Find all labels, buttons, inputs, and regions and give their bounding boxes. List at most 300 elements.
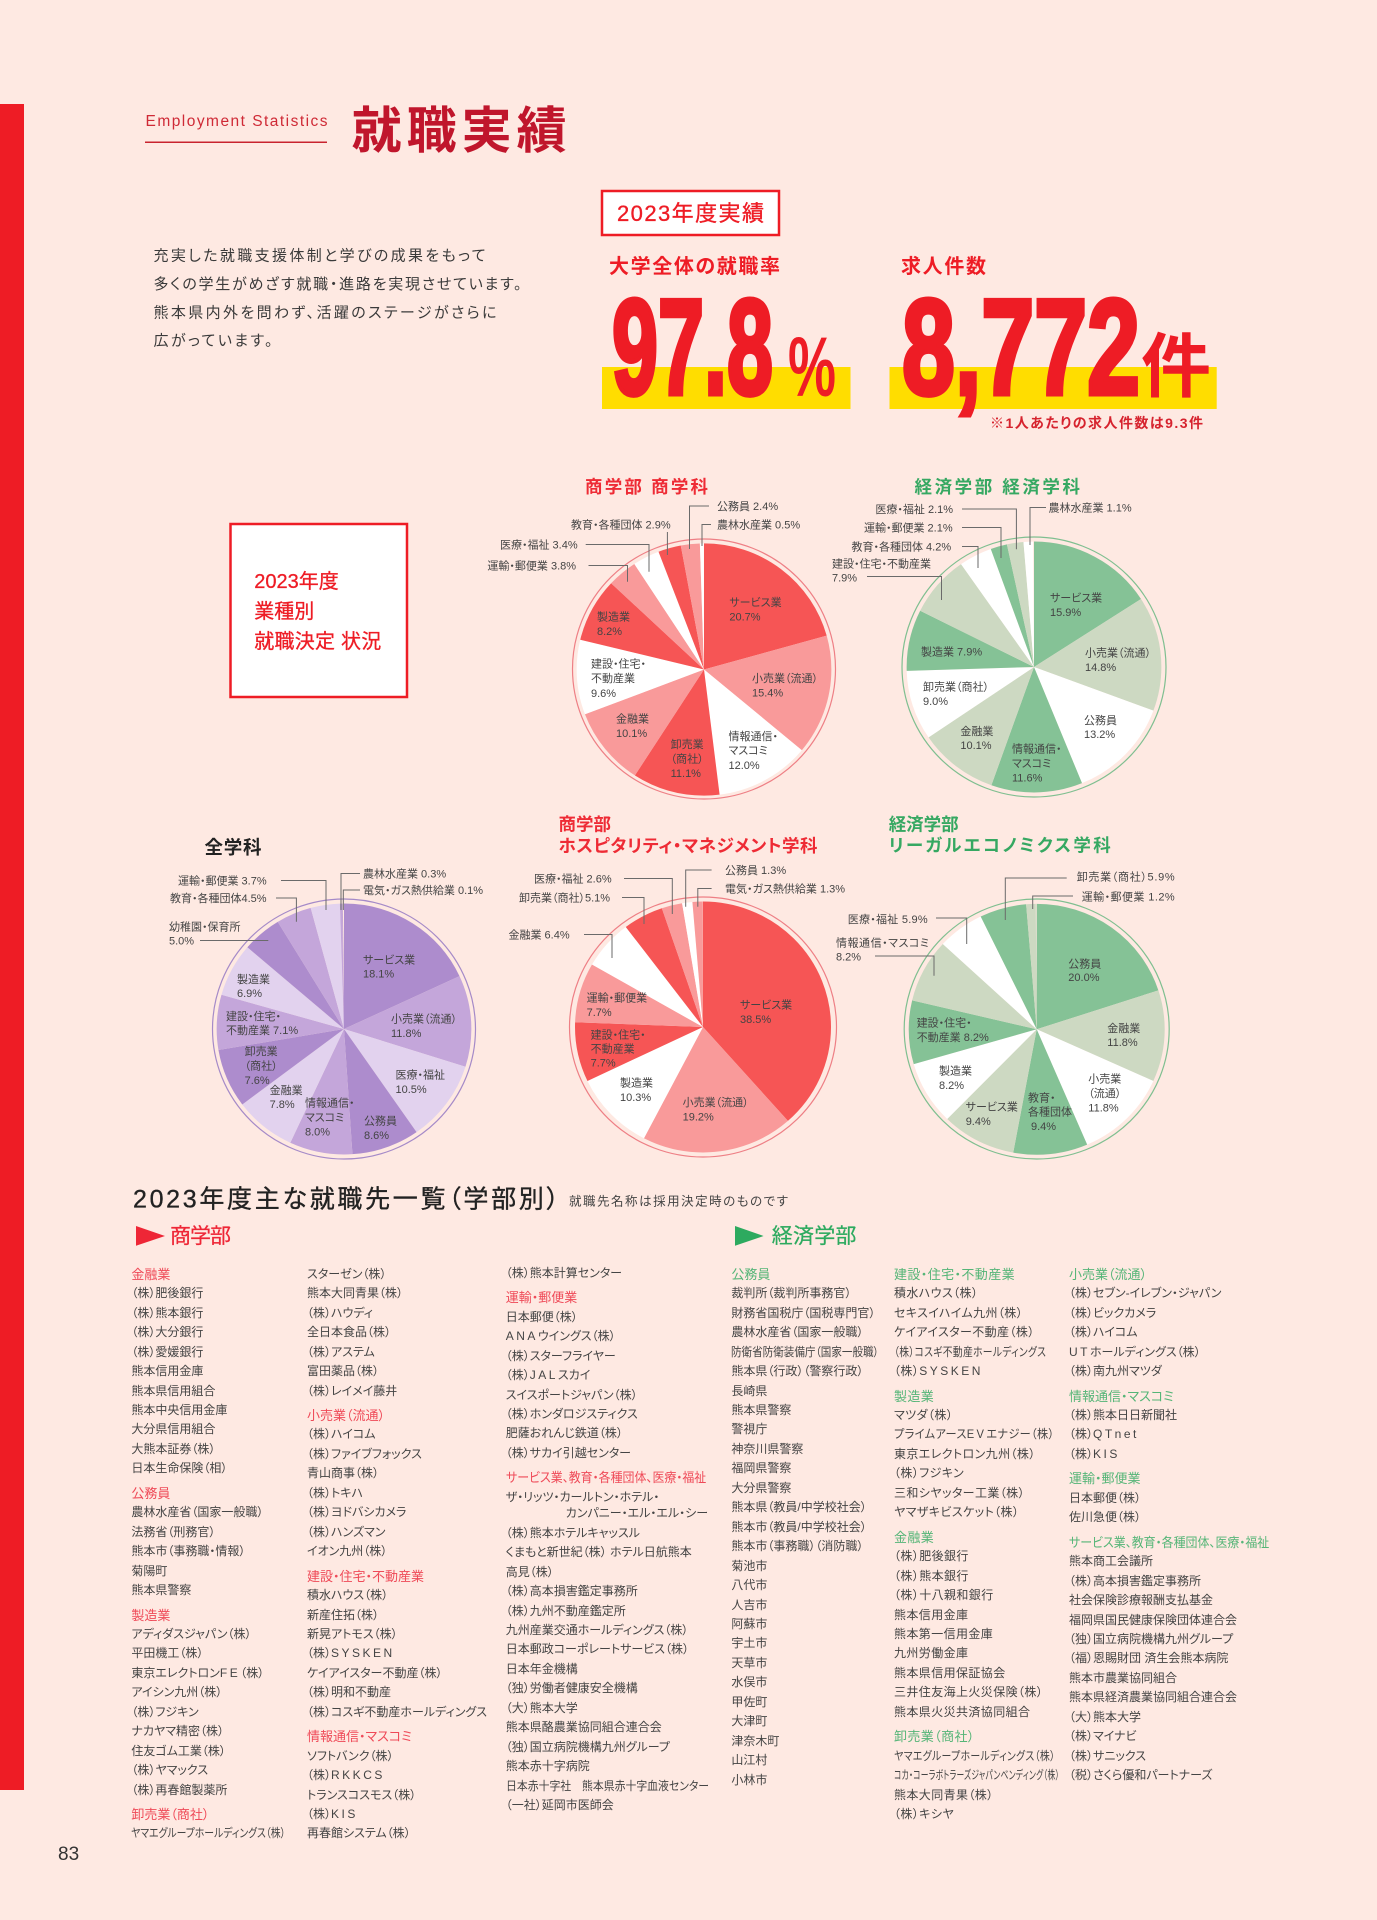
box: 2023年度 業種別 就職決定状況: 業種別	[254, 600, 314, 623]
slice labels: 不動産業	[591, 1042, 635, 1056]
group: サービス業ほか	[1069, 1535, 1269, 1782]
slice labels: 小売業	[1088, 1073, 1121, 1086]
callouts: 医療・福祉 2.6%	[534, 872, 612, 886]
group: 情報通信: （株）RKKCS	[307, 1768, 385, 1782]
callouts	[832, 501, 1132, 600]
intro paragraph: 熊本県内外を問わず、活躍のステージがさらに	[154, 304, 496, 321]
group: 製造業: （株）ヤマックス	[131, 1763, 208, 1777]
group: 建設: 新晃アトモス（株）	[307, 1627, 398, 1641]
list column: 経済学部 3	[1069, 1267, 1269, 1782]
slice labels: 金融業	[270, 1084, 303, 1097]
group: 小売業: （株）トキハ	[307, 1486, 363, 1500]
group: サービス業ほか: （独）労働者健康安全機構	[506, 1681, 638, 1695]
pie title: 商学部	[558, 814, 611, 834]
group: サービス業ほか: 社会保険診療報酬支払基金	[1069, 1593, 1213, 1607]
stat label: 大学全体の就職率	[609, 255, 780, 278]
slice labels: 公務員	[364, 1113, 397, 1127]
intro paragraph: 広がっています。	[154, 333, 272, 350]
group: 金融業: （株）肥後銀行	[131, 1286, 203, 1300]
group: 情報通信	[307, 1729, 416, 1840]
subtitle rule	[145, 142, 327, 143]
group: 金融業: （株）愛媛銀行	[131, 1345, 203, 1359]
callouts: 卸売業（商社）5.9%	[1077, 869, 1175, 883]
group: 建設: ケイアイスター不動産（株）	[894, 1325, 1035, 1339]
group: 公務員	[731, 1267, 879, 1787]
box: 2023年度 業種別 就職決定状況	[230, 524, 407, 697]
group: 運輸: 運輸・郵便業	[1069, 1471, 1141, 1486]
group: 金融業 continued	[307, 1267, 403, 1398]
pie slices	[640, 606, 768, 733]
group: 製造業: 製造業	[894, 1389, 934, 1404]
slice labels: 7.6%	[245, 1075, 270, 1087]
callouts: 農林水産業 0.3%	[363, 866, 446, 880]
slice labels: 8.2%	[597, 626, 622, 638]
slice labels: 金融業	[960, 725, 993, 738]
group: 公務員: 大津町	[731, 1714, 767, 1728]
pie slices	[973, 967, 1101, 1092]
slice labels: サービス業	[1050, 592, 1102, 605]
slice labels: 製造業	[939, 1064, 972, 1078]
callouts: 運輸・郵便業 2.1%	[864, 522, 953, 535]
group: 建設: 新産住拓（株）	[307, 1608, 379, 1622]
group: 運輸: ANAウイングス（株）	[506, 1329, 616, 1343]
group: 金融業 continued: 全日本食品（株）	[307, 1325, 391, 1339]
callouts: 建設・住宅・不動産業	[832, 557, 931, 571]
group: 公務員: 福岡県警察	[731, 1461, 791, 1475]
group: 製造業: 東京エレクトロン九州（株）	[894, 1447, 1036, 1461]
callouts: 幼稚園・保育所	[169, 919, 240, 933]
group: 建設: 建設・住宅・不動産業	[894, 1267, 1015, 1282]
group: 金融業 continued: スターゼン（株）	[307, 1267, 386, 1281]
slice labels: 情報通信・	[728, 729, 778, 743]
footnote: ※1人あたりの求人件数は9.3件	[990, 415, 1203, 431]
pie ring	[212, 899, 476, 1159]
group: 金融業 continued: （株）アステム	[307, 1345, 375, 1359]
group: 運輸: スイスポートジャパン（株）	[506, 1388, 638, 1402]
group: 情報通信: 情報通信・マスコミ	[1069, 1389, 1174, 1404]
group: サービス業ほか: （株）マイナビ	[1069, 1729, 1137, 1743]
slice labels: 11.8%	[1107, 1037, 1138, 1049]
group: 公務員: 熊本県（教員/中学校社会）	[731, 1500, 867, 1514]
group: 製造業: 東京エレクトロンFE（株）	[131, 1666, 264, 1680]
group: 小売業: （株）ビックカメラ	[1069, 1306, 1156, 1320]
group: 製造業: マツダ（株）	[894, 1408, 953, 1422]
group: 製造業: アディダスジャパン（株）	[131, 1627, 251, 1641]
group: 公務員: 農林水産省（国家一般職）	[731, 1325, 863, 1339]
badge: 2023年度実績: 2023年度実績	[617, 201, 764, 226]
slice labels: サービス業	[740, 998, 792, 1011]
slice labels: （流通）	[1088, 1087, 1121, 1100]
group: サービス業ほか: 高見（株）	[506, 1565, 554, 1579]
group: 公務員: 神奈川県警察	[731, 1442, 803, 1456]
yellow highlight	[602, 367, 850, 409]
slice labels: 小売業（流通）	[683, 1096, 749, 1109]
group: サービス業ほか: （株）熊本ホテルキャッスル	[506, 1526, 640, 1540]
group: 製造業: ヤマザキビスケット（株）	[894, 1505, 1019, 1519]
slice labels: 小売業（流通）	[752, 672, 818, 685]
callouts	[508, 863, 845, 958]
list column: 商学部 1	[131, 1267, 286, 1840]
group: 製造業	[894, 1389, 1055, 1519]
group: 公務員: 天草市	[731, 1656, 767, 1670]
group: 運輸	[1069, 1471, 1141, 1524]
group: 小売業: 小売業（流通）	[1069, 1267, 1147, 1282]
callouts: 農林水産業 1.1%	[1048, 501, 1132, 515]
group: サービス業ほか	[506, 1470, 709, 1812]
left red bar	[0, 104, 24, 1790]
slice labels: 9.0%	[923, 696, 948, 708]
pie title: 商学部 商学科	[585, 477, 708, 497]
group: サービス業ほか: 熊本県酪農業協同組合連合会	[506, 1720, 662, 1734]
group: 金融業: 熊本県信用組合	[131, 1384, 215, 1398]
callouts: 運輸・郵便業 3.7%	[178, 874, 267, 887]
pie ring	[902, 537, 1166, 797]
callouts: 公務員 2.4%	[717, 499, 778, 513]
slice labels: 小売業（流通）	[1085, 647, 1151, 660]
group: 金融業: 熊本中央信用金庫	[131, 1403, 227, 1417]
group: サービス業ほか: 熊本赤十字病院	[506, 1759, 590, 1773]
group: サービス業ほか: 日本赤十字社 熊本県赤十字血液センター	[506, 1779, 709, 1793]
callouts	[169, 866, 483, 948]
stat: employment rate	[602, 255, 850, 423]
group: 公務員: 公務員	[131, 1486, 170, 1501]
slice labels: 7.8%	[270, 1099, 295, 1111]
group: 公務員: 財務省国税庁（国税専門官）	[731, 1306, 875, 1320]
group: サービス業ほか: （福）恩賜財団 済生会熊本病院	[1069, 1651, 1228, 1665]
group: 小売業: イオン九州（株）	[307, 1544, 387, 1558]
slice labels: 10.3%	[620, 1092, 651, 1104]
slice labels	[587, 991, 792, 1124]
group: 運輸: 佐川急便（株）	[1069, 1510, 1141, 1524]
intro paragraph: 充実した就職支援体制と学びの成果をもって	[154, 248, 486, 265]
group: 製造業: 製造業	[131, 1608, 170, 1622]
pie title: リーガルエコノミクス学科	[889, 836, 1111, 856]
group: 製造業: （株）フジキン	[894, 1466, 964, 1480]
slice labels: 15.4%	[752, 688, 783, 700]
group: 卸売業: 熊本大同青果（株）	[894, 1788, 994, 1802]
group: 建設	[307, 1569, 487, 1719]
group: 運輸: （株）スターフライヤー	[506, 1349, 616, 1363]
group: サービス業ほか: 熊本市農業協同組合	[1069, 1671, 1177, 1685]
group: 製造業: （株）再春館製薬所	[131, 1783, 227, 1797]
callouts: 農林水産業 0.5%	[717, 517, 800, 531]
slice labels: 建設・住宅・	[226, 1009, 281, 1023]
pie ring	[570, 897, 836, 1157]
intro paragraph: 多くの学生がめざす就職・進路を実現させています。	[154, 275, 522, 293]
group: 卸売業: ヤマエグループホールディングス（株）	[131, 1826, 286, 1840]
group: 情報通信: （株）QTnet	[1069, 1427, 1139, 1441]
group: 建設: （株）SYSKEN	[894, 1364, 983, 1378]
group: 情報通信	[1069, 1389, 1177, 1461]
number 8,772: 8,772	[902, 271, 1140, 423]
slice labels	[226, 953, 457, 1142]
faculty header: 商学部	[136, 1225, 231, 1248]
group: 小売業: UTホールディングス（株）	[1069, 1345, 1201, 1359]
group: 金融業: 九州労働金庫	[894, 1646, 968, 1660]
group: サービス業ほか: 日本郵政コーポレートサービス（株）	[506, 1642, 689, 1656]
group: サービス業ほか: 熊本県経済農業協同組合連合会	[1069, 1690, 1237, 1704]
pie slices	[280, 966, 408, 1092]
group: 小売業: （株）南九州マツダ	[1069, 1364, 1162, 1378]
slice labels: （商社）	[671, 752, 704, 766]
callouts: 情報通信・マスコミ	[836, 936, 929, 950]
group: 金融業: （株）熊本銀行	[894, 1569, 969, 1583]
header	[145, 103, 567, 159]
group: 卸売業: （株）キシヤ	[894, 1807, 954, 1821]
group: サービス業ほか: （株）サニックス	[1069, 1749, 1146, 1763]
group: 小売業: 小売業（流通）	[307, 1408, 385, 1423]
group: 公務員: 長崎県	[731, 1384, 767, 1398]
group: 情報通信: 情報通信・マスコミ	[307, 1729, 412, 1744]
group: 公務員: 農林水産省（国家一般職）	[131, 1505, 263, 1519]
unit 件: 件	[1141, 328, 1211, 406]
group: 運輸: 日本郵便（株）	[506, 1310, 578, 1324]
group: 金融業: （株）十八親和銀行	[894, 1588, 994, 1602]
pie: 経済学部 リーガルエコノミクス学科	[836, 814, 1175, 1159]
group: 建設: （株）明和不動産	[307, 1685, 391, 1699]
slice labels	[921, 592, 1151, 785]
group: 運輸	[506, 1290, 638, 1460]
group: 小売業: （株）ハイコム	[307, 1427, 376, 1441]
group: 運輸: 日本郵便（株）	[1069, 1491, 1141, 1505]
group: サービス業ほか: （大）熊本大学	[506, 1701, 578, 1715]
slice labels: 9.6%	[591, 688, 616, 700]
slice labels: 10.5%	[396, 1084, 427, 1096]
slice labels: 15.9%	[1050, 607, 1081, 619]
slice labels: 教育・	[1028, 1091, 1056, 1104]
callouts: 医療・福祉 3.4%	[500, 537, 578, 551]
callouts	[487, 499, 800, 582]
slice labels: 6.9%	[237, 988, 262, 1000]
faculty header: 経済学部: 経済学部	[772, 1225, 856, 1248]
group: 運輸: （株）ホンダロジスティクス	[506, 1407, 638, 1421]
group: 情報通信: ソフトバンク（株）	[307, 1749, 394, 1763]
slice labels: 11.8%	[391, 1028, 422, 1040]
group: サービス業ほか: くまもと新世紀（株） ホテル日航熊本	[506, 1545, 692, 1559]
group: 卸売業: 卸売業（商社）	[131, 1807, 209, 1822]
slice labels: 情報通信・	[1012, 742, 1062, 756]
slice labels: 建設・住宅・	[591, 1028, 646, 1042]
group: 小売業: （株）ハイコム	[1069, 1325, 1138, 1339]
group: 小売業	[307, 1408, 422, 1558]
callouts: 教育・各種団体 2.9%	[571, 517, 671, 531]
group: 小売業: （株）セブン-イレブン・ジャパン	[1069, 1286, 1221, 1300]
group: 製造業: ナカヤマ精密（株）	[131, 1724, 224, 1738]
badge: 2023年度実績	[602, 191, 779, 235]
group: 公務員: 法務省（刑務官）	[131, 1525, 215, 1539]
intro paragraph	[154, 248, 522, 350]
callouts	[836, 869, 1175, 976]
group: 建設: （株）コスギ不動産ホールディングス	[894, 1345, 1046, 1359]
group: サービス業ほか: （大）熊本大学	[1069, 1710, 1141, 1724]
slice labels: マスコミ	[728, 745, 768, 757]
group: 公務員: 防衛省防衛装備庁（国家一般職）	[731, 1345, 879, 1359]
group: 公務員: 水俣市	[731, 1675, 767, 1689]
slice labels: 金融業	[1107, 1022, 1140, 1035]
group: サービス業ほか: 日本年金機構	[506, 1662, 578, 1676]
group: 公務員: 熊本市（事務職）（消防職）	[731, 1539, 863, 1553]
stat: job offers	[890, 255, 1217, 431]
slice labels: 9.4%	[1031, 1121, 1056, 1133]
group: 金融業: 金融業	[131, 1267, 170, 1282]
group: サービス業ほか: 九州産業交通ホールディングス（株）	[506, 1623, 688, 1637]
group: サービス業ほか: カンパニー・エル・エル・シー	[566, 1506, 708, 1520]
english subtitle: Employment Statistics	[146, 113, 328, 130]
group: 金融業: 大分県信用組合	[131, 1422, 215, 1436]
pie: 全学科	[169, 837, 483, 1159]
group: 公務員: 人吉市	[731, 1598, 767, 1612]
slice labels: 13.2%	[1084, 729, 1115, 741]
callouts: 8.2%	[836, 952, 861, 964]
slice labels: 8.6%	[364, 1130, 389, 1142]
list heading: 2023年度主な就職先一覧（学部別）	[133, 1186, 559, 1214]
slice labels: 製造業	[620, 1076, 653, 1090]
pie slices	[970, 604, 1098, 730]
group: 公務員: 公務員	[731, 1267, 770, 1282]
slice labels: （商社）	[245, 1059, 278, 1073]
slice labels: 11.1%	[671, 768, 701, 780]
group: 金融業	[131, 1267, 227, 1475]
callouts: 電気・ガス熱供給業 0.1%	[363, 883, 483, 897]
group: 公務員: 熊本県警察	[731, 1403, 791, 1417]
group: 運輸: （株）サカイ引越センター	[506, 1446, 631, 1460]
slice labels: 18.1%	[363, 968, 394, 980]
slice labels: 製造業	[597, 610, 630, 624]
group: 金融業: （株）肥後銀行	[894, 1549, 969, 1563]
group: 情報通信: （株）熊本日日新聞社	[1069, 1408, 1177, 1422]
group: 公務員: 八代市	[731, 1578, 767, 1592]
callouts: 教育・各種団体4.5%	[170, 891, 267, 905]
slice labels: 不動産業	[591, 671, 635, 685]
slice labels: 卸売業	[245, 1044, 278, 1058]
slice labels: 8.0%	[305, 1127, 330, 1139]
group: 金融業: 熊本県火災共済協同組合	[894, 1705, 1030, 1719]
group: 小売業	[1069, 1267, 1222, 1378]
group: 公務員: 熊本市（事務職・情報）	[131, 1544, 245, 1558]
slice labels: 38.5%	[740, 1014, 771, 1026]
callouts: 5.0%	[169, 936, 194, 948]
group: 公務員: 警視庁	[731, 1422, 767, 1436]
group: 公務員: 熊本市（教員/中学校社会）	[731, 1520, 867, 1534]
number 97.8: 97.8	[612, 271, 773, 423]
group: 情報通信: （株）KIS	[307, 1807, 358, 1821]
slice labels: マスコミ	[305, 1112, 344, 1124]
slice labels: 14.8%	[1085, 662, 1116, 674]
slice labels: サービス業	[729, 596, 782, 609]
slice labels: 製造業	[237, 972, 270, 986]
group: 製造業: アイシン九州（株）	[131, 1685, 222, 1699]
slice labels: 20.7%	[729, 612, 761, 624]
slice labels: マスコミ	[1012, 758, 1051, 770]
slice labels: 11.8%	[1088, 1103, 1119, 1115]
slice labels: 運輸・郵便業	[587, 991, 647, 1004]
group: 卸売業	[131, 1807, 286, 1840]
slice labels: 8.2%	[939, 1080, 964, 1092]
callouts: 運輸・郵便業 1.2%	[1082, 890, 1175, 903]
slice labels: 医療・福祉	[396, 1067, 445, 1081]
callouts: 7.9%	[832, 573, 857, 585]
pie slices	[639, 964, 767, 1090]
callouts: 卸売業（商社）5.1%	[519, 890, 610, 904]
pie ring	[904, 899, 1169, 1159]
callouts: 電気・ガス熱供給業 1.3%	[725, 882, 845, 896]
group: サービス業ほか: （株）高本損害鑑定事務所	[506, 1584, 638, 1598]
group: 情報通信: 再春館システム（株）	[307, 1826, 411, 1840]
group: 建設: （株）SYSKEN	[307, 1646, 395, 1660]
group: 運輸: 運輸・郵便業	[506, 1290, 577, 1305]
group: 情報通信: トランスコスモス（株）	[307, 1788, 416, 1802]
slice labels	[917, 956, 1140, 1133]
slice labels: 製造業 7.9%	[921, 644, 982, 658]
group: サービス業ほか: サービス業、教育・各種団体、医療・福祉	[1069, 1535, 1269, 1550]
slice labels: 建設・住宅・	[917, 1016, 972, 1030]
group: 建設: 積水ハウス（株）	[307, 1588, 388, 1602]
slice labels: 12.0%	[728, 760, 760, 772]
slice labels: 卸売業（商社）	[923, 680, 989, 694]
group: 金融業: 大熊本証券（株）	[131, 1442, 215, 1456]
group: 建設: （株）コスギ不動産ホールディングス	[307, 1705, 487, 1719]
slice labels: サービス業	[965, 1101, 1018, 1114]
box: 2023年度 業種別 就職決定状況: 2023年度	[254, 570, 339, 593]
slice labels: 不動産業 7.1%	[226, 1023, 298, 1037]
slice labels: 19.2%	[683, 1112, 714, 1124]
group: 金融業: （株）熊本銀行	[131, 1306, 203, 1320]
group: 公務員: 菊池市	[731, 1559, 767, 1573]
slice labels: 公務員	[1068, 956, 1101, 970]
slice labels: 10.1%	[616, 728, 647, 740]
group: 金融業: 熊本県信用保証協会	[894, 1666, 1006, 1680]
group: 運輸: 肥薩おれんじ鉄道（株）	[506, 1426, 623, 1440]
slice labels: 卸売業	[671, 737, 704, 751]
group: 製造業: 平田機工（株）	[131, 1646, 203, 1660]
list column: 商学部 3	[506, 1266, 709, 1812]
list column: 商学部 2	[307, 1267, 487, 1840]
group: 金融業: 金融業	[894, 1530, 934, 1545]
callouts: 医療・福祉 5.9%	[848, 912, 928, 926]
percent sign: %	[788, 320, 836, 414]
group: 建設: ケイアイスター不動産（株）	[307, 1666, 442, 1680]
group: 卸売業: コカ・コーラボトラーズジャパンベンディング（株）	[894, 1768, 1060, 1782]
box: 2023年度 業種別 就職決定状況: 就職決定 状況	[254, 630, 381, 653]
faculty header: 経済学部	[735, 1225, 856, 1248]
group: 金融業 continued: （株）レイメイ藤井	[307, 1384, 397, 1398]
group: 金融業: 三井住友海上火災保険（株）	[894, 1685, 1043, 1699]
group: 金融業 continued: （株）ハウディ	[307, 1306, 373, 1320]
slice labels: 7.7%	[591, 1058, 616, 1070]
group: 製造業: 三和シヤッター工業（株）	[894, 1486, 1025, 1500]
slice labels: 11.6%	[1012, 773, 1043, 785]
group: 公務員	[131, 1486, 263, 1597]
slice labels: 公務員	[1084, 713, 1117, 727]
yellow highlight	[890, 367, 1217, 409]
group: 卸売業: ヤマエグループホールディングス（株）	[894, 1749, 1055, 1763]
group: サービス業ほか: （株）九州不動産鑑定所	[506, 1604, 626, 1618]
group: 金融業: 熊本信用金庫	[131, 1364, 203, 1378]
group: 小売業: （株）ハンズマン	[307, 1525, 385, 1539]
slice labels	[591, 596, 818, 780]
group: 情報通信: （株）KIS	[1069, 1447, 1120, 1461]
slice labels: 情報通信・	[305, 1096, 354, 1110]
stat label: 求人件数	[901, 255, 986, 278]
group: 公務員: 津奈木町	[731, 1734, 779, 1748]
group: 金融業: 日本生命保険（相）	[131, 1461, 227, 1475]
pie: 商学部 ホスピタリティ・マネジメント学科	[508, 814, 845, 1157]
pie title: ホスピタリティ・マネジメント学科	[558, 836, 818, 856]
group: サービス業ほか: （独）国立病院機構九州グループ	[506, 1740, 670, 1754]
slice labels: 9.4%	[966, 1116, 991, 1128]
group: 運輸: （株）JALスカイ	[506, 1368, 590, 1382]
group: 金融業	[894, 1530, 1043, 1719]
